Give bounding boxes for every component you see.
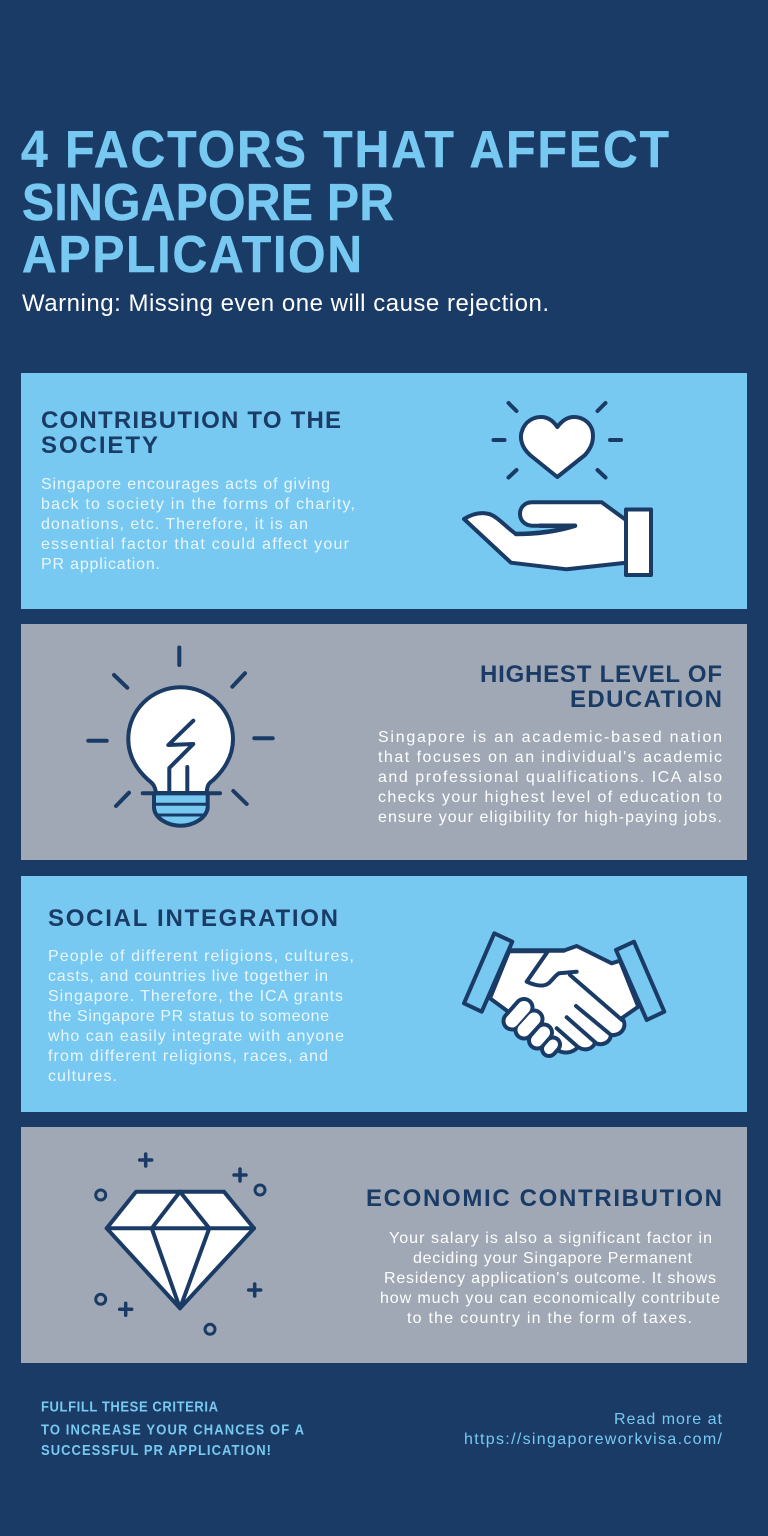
- panel: contribution to the society: [21, 373, 747, 609]
- panel: economic contribution: [21, 1127, 747, 1363]
- footer link: Read more at: [614, 1411, 723, 1428]
- text: social integration body: Singapore. Therefore, the ICA grants: [48, 988, 343, 1005]
- icon: hand holding heart: [464, 403, 651, 575]
- text: contribution body: PR application.: [41, 556, 160, 573]
- subtitle: Warning: Missing even one will cause rejection.: [22, 290, 549, 317]
- text: economic body: how much you can economically contribute: [380, 1290, 720, 1307]
- text: education body: ensure your eligibility for high-paying jobs.: [378, 809, 722, 826]
- footer call to action: TO INCREASE YOUR CHANCES OF A: [41, 1422, 304, 1438]
- text: social integration body: casts, and countries live together in: [48, 968, 328, 985]
- heading: highest level of education: EDUCATION: [570, 686, 722, 713]
- title: APPLICATION: [22, 225, 362, 283]
- footer link: [464, 1411, 723, 1448]
- text: contribution body: [41, 476, 355, 573]
- heading: economic contribution: ECONOMIC CONTRIBUTION: [366, 1185, 722, 1212]
- text: social integration body: People of different religions, cultures,: [48, 948, 354, 965]
- text: social integration body: who can easily integrate with anyone: [47, 1028, 344, 1045]
- heading: contribution to the society: [41, 407, 341, 459]
- heading: social integration: SOCIAL INTEGRATION: [48, 905, 338, 932]
- footer call to action: SUCCESSFUL PR APPLICATION!: [41, 1442, 271, 1458]
- footer link: https://singaporeworkvisa.com/: [464, 1431, 723, 1448]
- panel: highest level of education: [21, 624, 747, 860]
- heading: contribution to the society: SOCIETY: [41, 432, 158, 459]
- text: contribution body: donations, etc. Therefore, it is an: [41, 516, 308, 533]
- title: [21, 120, 669, 283]
- text: contribution body: Singapore encourages acts of giving: [41, 476, 330, 493]
- icon: handshake: [464, 933, 664, 1053]
- text: contribution body: essential factor that could affect your: [41, 536, 350, 553]
- text: education body: and professional qualifications. ICA also: [378, 769, 722, 786]
- text: education body: that focuses on an individual's academic: [378, 749, 722, 766]
- text: economic body: deciding your Singapore Permanent: [413, 1250, 693, 1267]
- finger knuckles: [512, 1008, 553, 1049]
- text: contribution body: back to society in the forms of charity,: [41, 496, 355, 513]
- panel: social integration: [21, 876, 747, 1112]
- text: economic body: Your salary is also a significant factor in: [389, 1230, 712, 1247]
- text: economic body: to the country in the form of taxes.: [407, 1310, 692, 1327]
- footer call to action: FULFILL THESE CRITERIA: [41, 1399, 218, 1415]
- text: economic body: [380, 1230, 720, 1327]
- title: 4 FACTORS THAT AFFECT: [21, 120, 669, 178]
- icon: light bulb: [88, 648, 273, 826]
- text: social integration body: [47, 948, 354, 1085]
- text: social integration body: cultures.: [48, 1068, 117, 1085]
- text: social integration body: the Singapore PR status to someone: [48, 1008, 329, 1025]
- text: social integration body: from different religions, races, and: [48, 1048, 328, 1065]
- icon: diamond: [96, 1154, 265, 1334]
- footer call to action: [41, 1399, 304, 1458]
- text: education body: Singapore is an academic-based nation: [378, 729, 722, 746]
- title: SINGAPORE PR: [22, 173, 394, 231]
- heading: highest level of education: [480, 661, 722, 713]
- heading: contribution to the society: CONTRIBUTION TO THE: [41, 407, 341, 434]
- text: economic body: Residency application's outcome. It shows: [384, 1270, 716, 1287]
- text: education body: checks your highest level of education to: [378, 789, 722, 806]
- text: education body: [378, 729, 722, 826]
- heading: highest level of education: HIGHEST LEVEL OF: [480, 661, 722, 688]
